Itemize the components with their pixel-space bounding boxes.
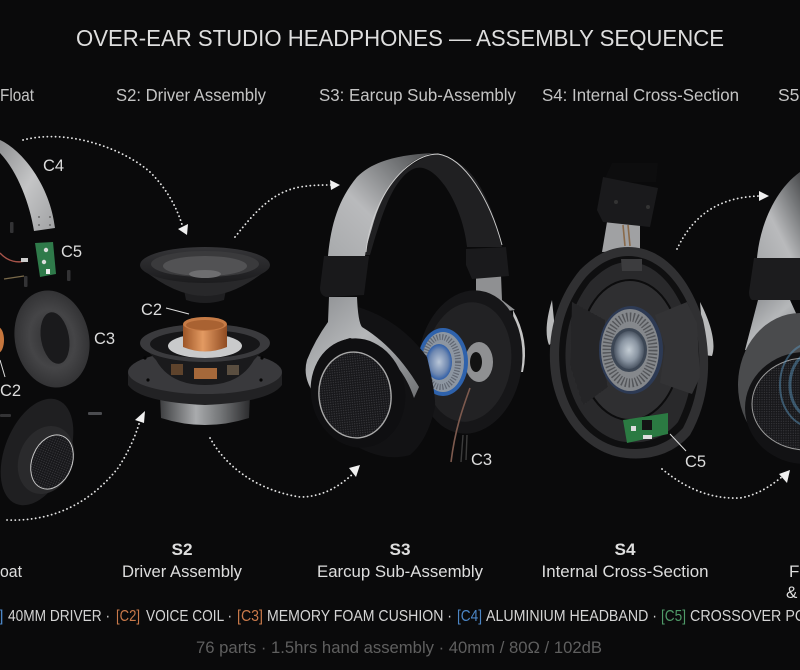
C3 cushion — [6, 283, 98, 395]
arrowheads — [135, 180, 790, 483]
wires black — [461, 435, 467, 462]
left earcup face — [301, 329, 415, 457]
bottom stage captions: S3 — [390, 540, 410, 559]
flange — [128, 350, 282, 405]
bottom stage captions: Earcup Sub-Assembly — [317, 562, 483, 581]
headband underside — [365, 153, 502, 255]
bottom stage captions: S4 — [614, 540, 636, 559]
S4 cross-section — [547, 163, 714, 471]
right foam — [655, 302, 700, 394]
dotted flow arrows — [7, 137, 783, 520]
label C3: C3 — [94, 330, 115, 348]
C2 leader and label — [0, 360, 21, 400]
speaker cone — [140, 247, 270, 303]
bottom stage captions — [0, 540, 800, 602]
component legend: [C5] — [661, 608, 686, 625]
S1 exploded parts — [0, 140, 115, 516]
blue glow rings — [780, 343, 800, 427]
shell — [738, 313, 800, 457]
bottom stage captions: & — [786, 583, 798, 602]
headband highlight — [366, 154, 502, 252]
cup inner rim — [559, 256, 699, 449]
C4 headband part — [0, 140, 55, 231]
spec footnote: 76 parts · 1.5hrs hand assembly · 40mm / 80Ω / 102dB — [196, 638, 602, 657]
left block — [320, 256, 369, 297]
top tab — [621, 259, 642, 271]
top stage labels — [0, 85, 800, 105]
yoke — [602, 222, 640, 252]
component legend: VOICE COIL · — [146, 608, 232, 625]
C5 board and cable — [0, 242, 56, 279]
block — [597, 177, 658, 227]
PCB — [623, 413, 668, 443]
magnet plate — [168, 334, 242, 358]
label C4: C4 — [43, 157, 64, 175]
mesh — [752, 358, 800, 450]
earpad — [745, 352, 800, 464]
cup floor — [565, 262, 693, 442]
label C3: C3 — [471, 451, 492, 469]
S3 headphones — [301, 153, 532, 469]
open earcup — [408, 283, 532, 441]
C2 label and leader: C2 — [141, 301, 162, 319]
copper voice coil — [183, 317, 227, 352]
wires — [451, 388, 470, 462]
C2 label and leader — [141, 301, 189, 319]
screws — [0, 222, 102, 417]
cup shell — [550, 247, 708, 458]
copper coil sliver — [0, 327, 4, 353]
C5 leader and label — [670, 434, 706, 471]
left yoke and shell — [306, 297, 419, 398]
inner disc — [580, 280, 680, 420]
component legend: [C4] — [457, 608, 482, 625]
top stage labels: S4: Internal Cross-Section — [542, 85, 739, 105]
yoke — [745, 300, 800, 350]
title: OVER-EAR STUDIO HEADPHONES — ASSEMBLY SEQUENCE — [76, 25, 724, 51]
component legend: MEMORY FOAM CUSHION · — [267, 608, 452, 625]
left foam — [570, 302, 608, 405]
magnet — [465, 342, 493, 382]
driver — [599, 306, 663, 394]
bottom stage captions: oat — [0, 562, 22, 581]
headband silver — [328, 153, 433, 256]
yoke wires — [623, 225, 630, 246]
top stage labels: S3: Earcup Sub-Assembly — [319, 85, 516, 105]
right yoke — [476, 275, 515, 312]
S2 driver assembly — [128, 247, 282, 425]
headband — [757, 172, 800, 258]
component legend — [0, 608, 800, 625]
component legend: 40MM DRIVER · — [8, 608, 110, 625]
bottom stage captions: Driver Assembly — [122, 562, 242, 581]
component legend: [C3] — [237, 608, 263, 625]
bottom stage captions: S2 — [172, 540, 192, 559]
S5 final headphones — [738, 172, 800, 464]
blue driver — [418, 328, 468, 396]
top stage labels: Float — [0, 85, 34, 105]
bottom stage captions: Internal Cross-Section — [542, 562, 708, 581]
left earcup back — [315, 307, 435, 457]
lower cylinder — [160, 395, 250, 425]
top stage labels: S2: Driver Assembly — [116, 85, 266, 105]
C2 leader and label: C2 — [0, 382, 21, 400]
label C5: C5 — [61, 243, 82, 261]
basket with windows — [140, 324, 270, 385]
right block — [466, 247, 509, 279]
component legend: [C2] — [116, 608, 140, 625]
earcup with mesh — [0, 388, 88, 516]
C5 leader and label: C5 — [685, 453, 706, 471]
silver rim — [547, 300, 714, 356]
component legend: ALUMINIUM HEADBAND · — [486, 608, 657, 625]
strap — [603, 163, 658, 182]
block — [749, 258, 800, 300]
